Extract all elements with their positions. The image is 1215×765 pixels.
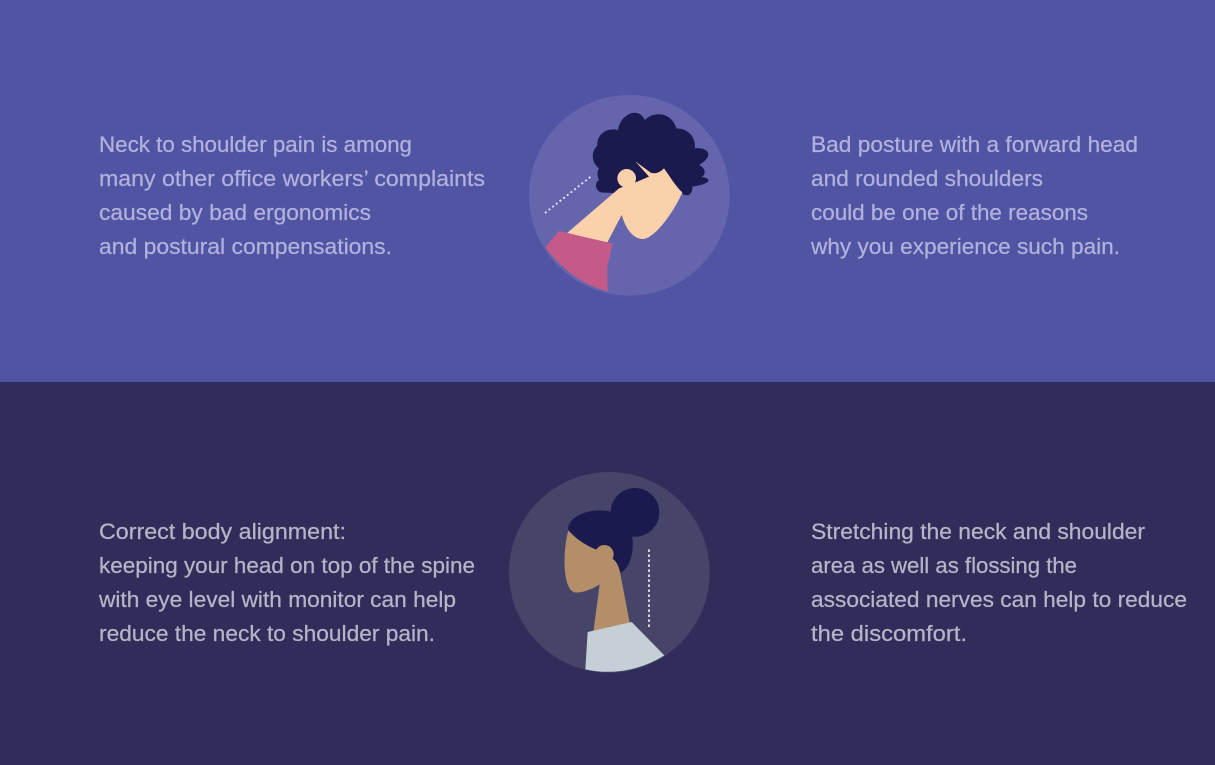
text: neck pain intro: and postural compensations.	[99, 234, 392, 259]
text: bad posture reason: Bad posture with a forward head	[811, 132, 1138, 157]
text: bad posture reason: could be one of the reasons	[811, 200, 1088, 225]
text: correct body alignment: reduce the neck to shoulder pain.	[99, 621, 435, 646]
text: bad posture reason: and rounded shoulders	[811, 166, 1043, 191]
illustration: forward head posture	[529, 95, 730, 296]
text: neck pain intro: Neck to shoulder pain is among	[99, 132, 412, 157]
text: correct body alignment: Correct body alignment:	[99, 519, 346, 544]
panel: correct posture	[0, 382, 1215, 765]
text: stretching advice: the discomfort.	[811, 621, 967, 646]
text: stretching advice: associated nerves can help to reduce	[811, 587, 1187, 612]
text: correct body alignment	[98, 519, 475, 646]
text: correct body alignment: with eye level with monitor can help	[98, 587, 456, 612]
illustration: correct head posture	[509, 472, 710, 673]
text: stretching advice: area as well as flossing the	[811, 553, 1077, 578]
text: correct body alignment: keeping your head on top of the spine	[99, 553, 475, 578]
text: neck pain intro	[99, 132, 485, 259]
panel: bad posture	[0, 0, 1215, 382]
text: stretching advice	[811, 519, 1187, 646]
text: stretching advice: Stretching the neck and shoulder	[811, 519, 1146, 544]
text: bad posture reason: why you experience such pain.	[810, 234, 1120, 259]
text: neck pain intro: many other office workers’ complaints	[99, 166, 485, 191]
text: neck pain intro: caused by bad ergonomics	[99, 200, 371, 225]
text: bad posture reason	[810, 132, 1138, 259]
